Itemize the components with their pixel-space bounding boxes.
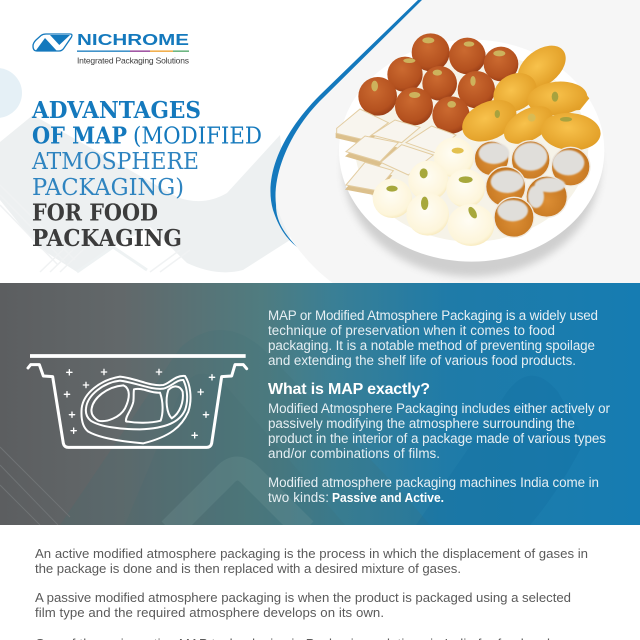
blue curved divider line <box>270 0 423 247</box>
definition paragraph: passively modifying the atmosphere surrounding the <box>268 416 575 431</box>
definition paragraph: and/or combinations of films. <box>268 446 440 461</box>
rasgulla sweets <box>373 137 494 246</box>
two kinds paragraph <box>268 475 599 505</box>
title: FOR FOOD <box>32 200 158 226</box>
active MAP paragraph <box>35 546 588 576</box>
panel background shapes <box>0 374 430 525</box>
meat cut <box>81 376 191 443</box>
title: PACKAGING <box>32 225 182 252</box>
two kinds paragraph: Passive and Active. <box>332 490 444 505</box>
gujiya pastries <box>455 37 602 153</box>
atmosphere plus marks <box>64 369 215 438</box>
plate <box>339 40 604 262</box>
definition paragraph: product in the interior of a package made of various types <box>268 431 606 446</box>
passive MAP paragraph <box>35 590 571 620</box>
title: ADVANTAGES <box>31 97 201 124</box>
intro paragraph: and extending the shelf life of various food products. <box>268 353 576 368</box>
panel: what is MAP <box>0 283 640 530</box>
gulab jamun sweets <box>358 33 518 134</box>
two kinds paragraph: Modified atmosphere packaging machines India come in <box>268 475 599 490</box>
kaju katli squares <box>336 109 456 195</box>
definition paragraph <box>268 401 611 461</box>
panel background <box>0 283 640 525</box>
two kinds paragraph: two kinds: <box>268 490 329 505</box>
tray body <box>28 365 247 447</box>
photo: plate of Indian sweets <box>336 33 604 277</box>
title <box>31 97 262 252</box>
title: ATMOSPHERE <box>31 149 199 175</box>
definition paragraph: Modified Atmosphere Packaging includes either actively or <box>268 401 611 416</box>
icon: food tray with meat and modified atmosphere <box>28 356 247 447</box>
logo wordmark: NICHROME <box>77 32 189 49</box>
body text: active and passive MAP <box>35 546 588 640</box>
logo: Nichrome <box>33 32 189 66</box>
title: OF MAP <box>32 122 127 150</box>
intro paragraph: MAP or Modified Atmosphere Packaging is a widely used <box>268 308 598 323</box>
passive MAP paragraph: A passive modified atmosphere packaging is when the product is packaged using a selected <box>35 590 571 605</box>
intro paragraph: technique of preservation when it comes to food <box>268 323 555 338</box>
plate shadow <box>343 60 600 277</box>
title: (MODIFIED <box>133 124 262 150</box>
heading: what is MAP exactly: What is MAP exactly? <box>268 381 430 398</box>
active MAP paragraph: An active modified atmosphere packaging is the process in which the displacement of gases in <box>35 546 588 561</box>
tray lid film <box>30 350 246 361</box>
photo background area <box>275 0 640 284</box>
title: PACKAGING) <box>32 175 184 201</box>
logo tagline: Integrated Packaging Solutions <box>77 56 189 66</box>
active MAP paragraph: the package is done and is then replaced with a desired mixture of gases. <box>35 561 461 576</box>
passive MAP paragraph: film type and the required atmosphere develops on its own. <box>35 605 384 620</box>
intro paragraph <box>268 308 598 368</box>
intro paragraph: packaging. It is a notable method of preventing spoilage <box>268 338 595 353</box>
silver-topped sweets in paper cups <box>474 141 590 237</box>
hero background <box>0 0 640 284</box>
logo rainbow rule <box>77 50 189 52</box>
logo mark <box>33 34 72 51</box>
